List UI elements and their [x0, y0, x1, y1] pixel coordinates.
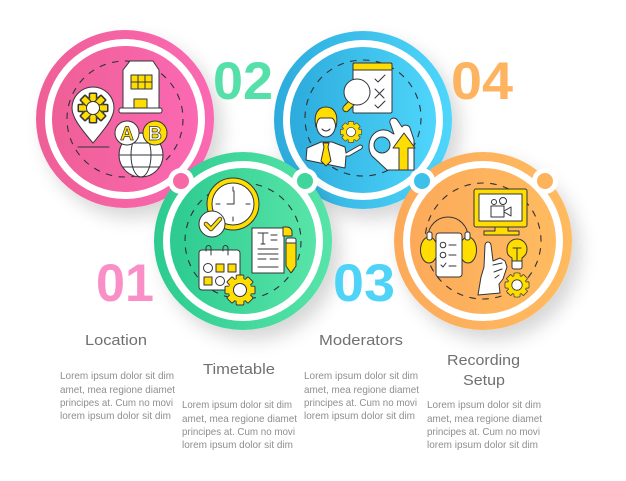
- icon: document: [252, 227, 292, 273]
- text block: moderators: [304, 332, 419, 422]
- panel: moderators circle: [274, 31, 452, 209]
- icon: globe with A and B bubbles: A: [120, 124, 134, 145]
- icon: location pin with gear: [72, 87, 114, 147]
- text block: recording setup: amet, mea regione diamet: [427, 414, 542, 425]
- icon: globe with A and B bubbles: B: [148, 124, 162, 145]
- icon: calendar: [199, 246, 240, 290]
- text block: timetable: principes at. Cum no movi: [182, 427, 295, 438]
- text block: timetable: [182, 361, 297, 451]
- panel: location circle: [36, 30, 214, 208]
- icon: headphones and phone: [420, 217, 476, 277]
- text block: location: Location: [85, 332, 147, 349]
- icon: light bulb: [507, 239, 527, 269]
- icon: OK hand with up arrow: [369, 118, 415, 170]
- text block: location: [60, 332, 175, 422]
- text block: moderators: principes at. Cum no movi: [304, 398, 417, 409]
- text block: location: lorem ipsum dolor sit dim: [60, 411, 171, 422]
- icon: clock with check: [199, 178, 259, 237]
- panel: recording setup circle: [394, 152, 572, 330]
- icon: gear: [225, 275, 255, 305]
- icon: pencil: [286, 238, 296, 273]
- icon: small gear: [340, 122, 362, 142]
- text block: moderators: Moderators: [319, 332, 403, 349]
- text block: recording setup: Recording: [447, 352, 520, 369]
- text block: moderators: amet, mea regione diamet: [304, 385, 419, 396]
- text block: recording setup: lorem ipsum dolor sit dim: [427, 440, 538, 451]
- text block: location: principes at. Cum no movi: [60, 398, 173, 409]
- text block: recording setup: Setup: [463, 372, 505, 389]
- panel: timetable circle: [154, 152, 332, 330]
- number 01: 01: [96, 254, 154, 313]
- text block: timetable: lorem ipsum dolor sit dim: [182, 440, 293, 451]
- connector dot: orange: [532, 168, 558, 194]
- text block: moderators: lorem ipsum dolor sit dim: [304, 411, 415, 422]
- text block: timetable: Timetable: [203, 361, 275, 378]
- icon: office building: [119, 61, 162, 113]
- text block: timetable: amet, mea regione diamet: [182, 414, 297, 425]
- text block: recording setup: principes at. Cum no movi: [427, 427, 540, 438]
- icon: raised finger hand: [478, 242, 507, 295]
- icon: checklist and magnifier: [343, 63, 392, 113]
- icon: businessman: [306, 107, 362, 168]
- text block: recording setup: [427, 352, 542, 451]
- connector dot: pink: [168, 168, 194, 194]
- text block: location: amet, mea regione diamet: [60, 385, 175, 396]
- text block: location: Lorem ipsum dolor sit dim: [60, 371, 174, 382]
- icon: gear: [505, 273, 529, 297]
- connector dot: green: [292, 168, 318, 194]
- number 03: 03: [333, 254, 395, 313]
- icon: globe with A and B bubbles: [115, 121, 167, 177]
- connector dot: blue: [409, 168, 435, 194]
- number 02: 02: [213, 52, 273, 111]
- text block: moderators: Lorem ipsum dolor sit dim: [304, 371, 418, 382]
- icon: monitor with camera: [474, 189, 527, 235]
- text block: timetable: Lorem ipsum dolor sit dim: [182, 400, 292, 411]
- text block: recording setup: Lorem ipsum dolor sit dim: [427, 400, 541, 411]
- number 04: 04: [451, 52, 514, 111]
